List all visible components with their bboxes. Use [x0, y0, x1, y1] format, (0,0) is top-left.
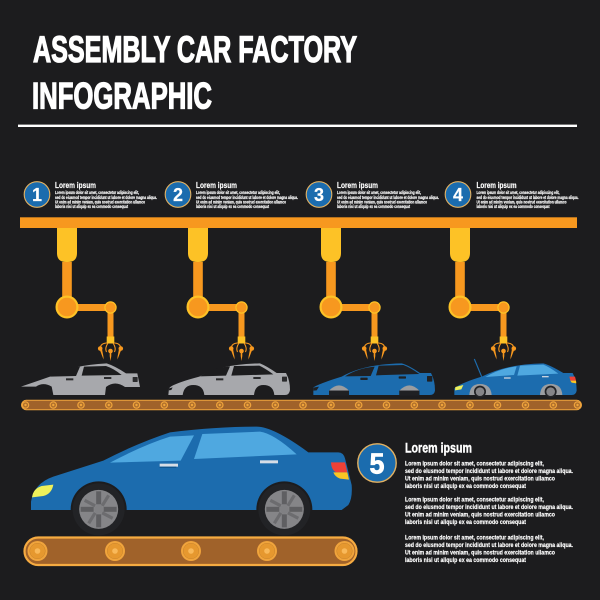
small conveyor belt — [22, 400, 582, 410]
step 4 — [445, 180, 578, 209]
paragraph 3: Lorem ipsum dolor sit amet, consectetur adipiscing elit, — [405, 534, 544, 542]
step 3: Lorem ipsum — [337, 180, 378, 190]
paragraph 1: Lorem ipsum dolor sit amet, consectetur adipiscing elit, — [405, 460, 544, 468]
paragraph 2: Lorem ipsum dolor sit amet, consectetur adipiscing elit, — [405, 496, 544, 504]
car shell stage 2 — [168, 363, 290, 395]
step 4: Lorem ipsum dolor sit amet, consectetur adipiscing elit, — [476, 190, 560, 195]
step 1: Ut enim ad minim veniam, quis nostrud exercitation ullamco — [55, 199, 145, 204]
finished car — [31, 427, 352, 537]
step 5: 5 — [370, 448, 384, 480]
step 3: laboris nisi ut aliquip ex ea commodo consequat — [337, 204, 410, 209]
car painted stage 3 — [313, 363, 435, 396]
large conveyor belt — [24, 538, 356, 565]
step 1: sed do eiusmod tempor incididunt ut labore et dolore magna aliqua. — [55, 195, 157, 200]
robot arm 3 — [321, 228, 387, 361]
paragraph 2 — [405, 496, 573, 526]
paragraph 3 — [405, 534, 573, 564]
step 3: 3 — [314, 185, 324, 205]
step 4: Ut enim ad minim veniam, quis nostrud exercitation ullamco — [476, 199, 567, 204]
paragraph 1: Ut enim ad minim veniam, quis nostrud exercitation ullamco — [405, 476, 555, 482]
paragraph 1: laboris nisi ut aliquip ex ea commodo consequat — [405, 483, 527, 490]
paragraph 2: laboris nisi ut aliquip ex ea commodo consequat — [405, 519, 527, 526]
step 3: sed do eiusmod tempor incididunt ut labore et dolore magna aliqua. — [337, 195, 439, 200]
step 1 — [24, 180, 157, 209]
title — [32, 29, 357, 116]
title: INFOGRAPHIC — [32, 76, 212, 116]
step 1: 1 — [32, 185, 42, 205]
step 2: laboris nisi ut aliquip ex ea commodo consequat — [196, 204, 269, 209]
step 4: 4 — [453, 185, 463, 205]
step 2: sed do eiusmod tempor incididunt ut labore et dolore magna aliqua. — [196, 195, 298, 200]
title divider — [18, 125, 577, 127]
step 3: Ut enim ad minim veniam, quis nostrud exercitation ullamco — [337, 199, 427, 204]
paragraph 3: Ut enim ad minim veniam, quis nostrud exercitation ullamco — [405, 550, 555, 556]
robot arm 4 — [450, 228, 516, 361]
step 1: Lorem ipsum dolor sit amet, consectetur adipiscing elit, — [55, 190, 139, 195]
robot arm 2 — [188, 228, 254, 361]
step 4: laboris nisi ut aliquip ex ea commodo consequat — [476, 204, 550, 209]
step 5 — [358, 440, 573, 564]
step 2: 2 — [173, 185, 183, 205]
step 1: Lorem ipsum — [55, 180, 96, 190]
overhead rail — [20, 217, 577, 228]
step 1: laboris nisi ut aliquip ex ea commodo consequat — [55, 204, 128, 209]
title: ASSEMBLY CAR FACTORY — [33, 29, 357, 70]
car shell stage 1 — [21, 363, 140, 395]
step 4: Lorem ipsum — [476, 180, 517, 190]
step 3 — [306, 180, 439, 209]
paragraph 3: laboris nisi ut aliquip ex ea commodo consequat — [405, 557, 527, 564]
step 2: Lorem ipsum dolor sit amet, consectetur adipiscing elit, — [196, 190, 280, 195]
step 2: Lorem ipsum — [196, 180, 237, 190]
step 5: Lorem ipsum — [405, 440, 472, 456]
step 3: Lorem ipsum dolor sit amet, consectetur adipiscing elit, — [337, 190, 421, 195]
step 2: Ut enim ad minim veniam, quis nostrud exercitation ullamco — [196, 199, 286, 204]
car painted stage 4 — [454, 359, 577, 398]
step 2 — [165, 180, 298, 209]
paragraph 2: Ut enim ad minim veniam, quis nostrud exercitation ullamco — [405, 512, 555, 518]
robot arm 1 — [57, 228, 123, 361]
paragraph 1 — [405, 460, 573, 490]
